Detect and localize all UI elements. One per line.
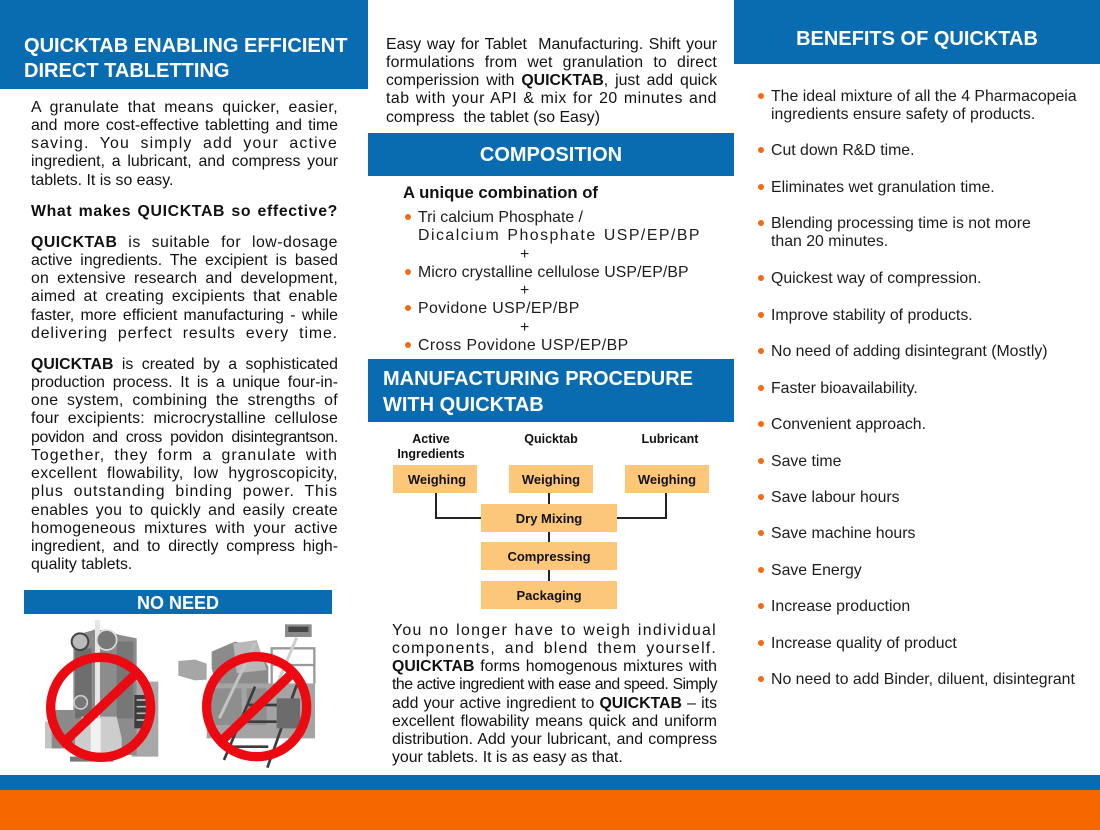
paragraph: suitable for low-dosage: faster, more efficient manufacturing - while xyxy=(31,306,338,324)
heading: manufacturing procedure with quicktab xyxy=(368,359,734,422)
heading: benefits of quicktab xyxy=(734,0,1100,64)
ingredient: micro crystalline cellulose: Micro crystalline cellulose USP/EP/BP xyxy=(418,264,689,281)
paragraph: suitable for low-dosage: on extensive research and development, xyxy=(31,270,338,287)
plus sign: + xyxy=(520,319,529,336)
icon: crossed-out fluid bed machine xyxy=(45,620,158,762)
intro paragraph xyxy=(31,98,338,188)
heading: no need xyxy=(24,590,332,614)
paragraph: no longer weigh components: the active ingredient with ease and speed. Simply xyxy=(392,676,717,693)
benefit 4: than 20 minutes. xyxy=(771,233,888,250)
paragraph: sophisticated production process: one system, combining the strengths of xyxy=(31,392,338,409)
flow chart: manufacturing procedure xyxy=(393,432,709,609)
paragraph: sophisticated production process: production process. It is a unique four-in- xyxy=(31,374,338,391)
box: compressing: Compressing xyxy=(507,549,591,564)
paragraph: no longer weigh components: components, and blend them yourself. xyxy=(392,640,717,657)
intro paragraph: easy way for tablet manufacturing: Easy way for Tablet Manufacturing. Shift your xyxy=(386,36,717,52)
plus sign: + xyxy=(520,246,529,263)
box: weighing quicktab: Weighing xyxy=(522,472,580,487)
paragraph: no longer weigh components: add your active ingredient to QUICKTAB – its xyxy=(392,694,717,712)
heading: no need: NO NEED xyxy=(137,593,219,613)
benefit 7: No need of adding disintegrant (Mostly) xyxy=(771,343,1048,360)
benefit 8: Faster bioavailability. xyxy=(771,380,918,396)
paragraph: sophisticated production process: povidon and cross povidon disintegrantson. xyxy=(31,428,338,446)
benefit 15: Increase quality of product xyxy=(771,634,957,652)
benefit 2: Cut down R&D time. xyxy=(771,142,915,159)
benefits list xyxy=(758,88,1077,688)
heading: composition: COMPOSITION xyxy=(480,144,622,166)
benefit 16: No need to add Binder, diluent, disintegrant xyxy=(771,671,1075,688)
heading: manufacturing procedure with quicktab: MANUFACTURING PROCEDURE xyxy=(383,368,693,390)
header: quicktab enabling efficient direct tabletting xyxy=(0,0,368,89)
label: lubricant: Lubricant xyxy=(642,432,698,446)
heading: composition xyxy=(368,133,734,176)
paragraph: no longer weigh components: excellent flowability means quick and uniform xyxy=(392,713,717,730)
box: packaging xyxy=(481,581,617,609)
benefit 4 xyxy=(758,215,1031,250)
paragraph: sophisticated production process: excellent flowability, low hygroscopicity, xyxy=(31,465,338,482)
heading: benefits of quicktab: BENEFITS OF QUICKTAB xyxy=(796,28,1038,50)
box: weighing active ingredients: Weighing xyxy=(408,472,466,487)
box: weighing lubricant: Weighing xyxy=(638,472,696,487)
paragraph: suitable for low-dosage: QUICKTAB is suitable for low-dosage xyxy=(31,234,338,250)
paragraph: sophisticated production process: homogeneous mixtures with your active xyxy=(31,520,338,537)
ingredient: tri calcium phosphate xyxy=(405,209,701,244)
composition list xyxy=(403,183,701,354)
benefit 5: Quickest way of compression. xyxy=(771,270,981,287)
footer: orange band xyxy=(0,790,1100,830)
icon: crossed-out high shear mixer xyxy=(178,624,315,768)
footer: blue stripe xyxy=(0,775,1100,790)
paragraph: sophisticated production process: four excipients: microcrystalline cellulose xyxy=(31,410,338,427)
box: compressing xyxy=(481,542,617,570)
benefit 6: Improve stability of products. xyxy=(771,306,973,324)
box: dry mixing xyxy=(481,504,617,532)
paragraph: sophisticated production process: plus outstanding binding power. This xyxy=(31,483,338,500)
benefit 4: Blending processing time is not more xyxy=(771,215,1031,232)
header: quicktab enabling efficient direct tabletting: QUICKTAB ENABLING EFFICIENT xyxy=(24,34,347,56)
benefit 3: Eliminates wet granulation time. xyxy=(771,178,995,196)
box: dry mixing: Dry Mixing xyxy=(516,511,582,526)
label: active ingredients: Ingredients xyxy=(397,447,465,461)
paragraph: suitable for low-dosage xyxy=(31,234,338,342)
ingredient: tri calcium phosphate: Dicalcium Phosphate USP/EP/BP xyxy=(418,227,701,244)
intro paragraph: tablets. It is so easy. xyxy=(31,172,173,188)
intro paragraph: A granulate that means quicker, easier, xyxy=(31,98,338,116)
paragraph: sophisticated production process: ingredient, and to directly compress high- xyxy=(31,538,338,555)
paragraph: sophisticated production process: quality tablets. xyxy=(31,556,132,573)
intro paragraph: easy way for tablet manufacturing: formulations from wet granulation to direct xyxy=(386,54,717,71)
benefit 1 xyxy=(758,88,1077,123)
intro paragraph: and more cost-effective tabletting and time xyxy=(31,117,338,134)
label: active ingredients: Active xyxy=(412,432,450,446)
ingredient: cross povidone: Cross Povidone USP/EP/BP xyxy=(418,337,629,354)
benefit 10: Save time xyxy=(771,452,841,470)
intro paragraph: easy way for tablet manufacturing: comperission with QUICKTAB, just add quick xyxy=(386,72,717,89)
paragraph: no longer weigh components: your tablets. It is as easy as that. xyxy=(392,749,623,766)
paragraph: sophisticated production process: QUICKTAB is created by a sophisticated xyxy=(31,356,338,372)
paragraph: sophisticated production process: Together, they form a granulate with xyxy=(31,447,338,464)
plus sign: + xyxy=(520,282,529,299)
benefit 1: ingredients ensure safety of products. xyxy=(771,106,1035,123)
benefit 14: Increase production xyxy=(771,598,910,615)
heading: manufacturing procedure with quicktab: WITH QUICKTAB xyxy=(383,394,544,416)
subheading: a unique combination of: A unique combination of xyxy=(403,183,598,202)
paragraph: sophisticated production process: enables you to quickly and easily create xyxy=(31,502,338,518)
benefit 11: Save labour hours xyxy=(771,488,900,506)
intro paragraph: easy way for tablet manufacturing xyxy=(386,36,717,126)
benefit 1: The ideal mixture of all the 4 Pharmacopeia xyxy=(771,88,1077,104)
machines crossed out xyxy=(45,620,316,768)
benefit 12: Save machine hours xyxy=(771,525,915,542)
intro paragraph: easy way for tablet manufacturing: tab with your API & mix for 20 minutes and xyxy=(386,90,717,107)
ingredient: povidone: Povidone USP/EP/BP xyxy=(418,300,580,317)
intro paragraph: ingredient, a lubricant, and compress your xyxy=(31,153,338,170)
box: weighing lubricant xyxy=(625,465,709,493)
label: quicktab: Quicktab xyxy=(524,432,578,446)
benefit 13: Save Energy xyxy=(771,562,862,578)
paragraph: no longer weigh components xyxy=(392,622,718,766)
label: active ingredients xyxy=(397,432,465,461)
paragraph: sophisticated production process xyxy=(31,356,338,573)
box: weighing active ingredients xyxy=(393,465,477,493)
header: quicktab enabling efficient direct tabletting: DIRECT TABLETTING xyxy=(24,60,230,82)
intro paragraph: saving. You simply add your active xyxy=(31,135,338,152)
paragraph: no longer weigh components: QUICKTAB forms homogenous mixtures with xyxy=(392,658,717,675)
box: weighing quicktab xyxy=(509,465,593,493)
subheading: what makes quicktab so effective: What makes QUICKTAB so effective? xyxy=(31,203,338,220)
paragraph: no longer weigh components: You no longer have to weigh individual xyxy=(392,622,717,638)
paragraph: suitable for low-dosage: delivering perfect results every time. xyxy=(31,325,338,342)
ingredient: tri calcium phosphate: Tri calcium Phosphate / xyxy=(418,209,583,226)
paragraph: suitable for low-dosage: aimed at creating excipients that enable xyxy=(31,288,338,305)
paragraph: suitable for low-dosage: active ingredients. The excipient is based xyxy=(31,252,338,269)
box: packaging: Packaging xyxy=(516,588,582,603)
intro paragraph: easy way for tablet manufacturing: compress the tablet (so Easy) xyxy=(386,108,600,126)
benefit 9: Convenient approach. xyxy=(771,416,926,433)
paragraph: no longer weigh components: distribution. Add your lubricant, and compress xyxy=(392,731,717,748)
